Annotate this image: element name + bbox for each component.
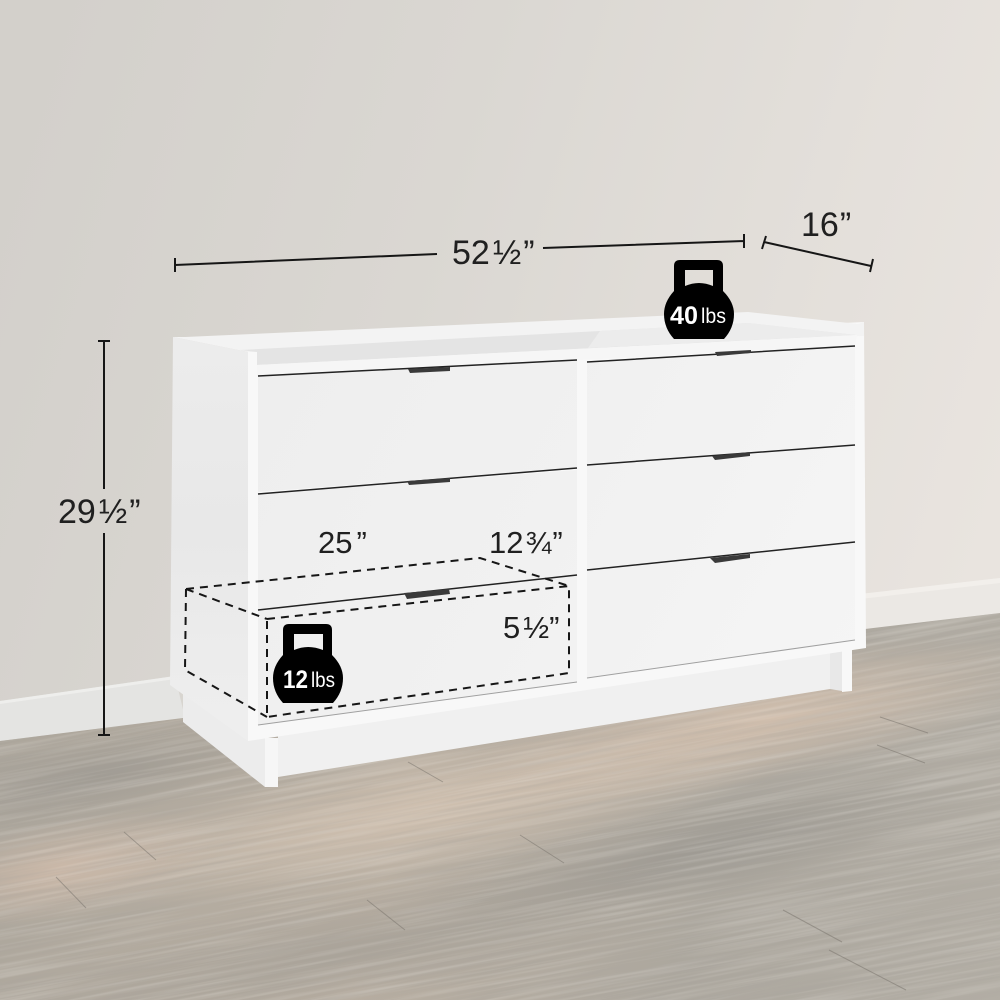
carcass front frame (248, 322, 866, 741)
plinth and feet (183, 648, 852, 787)
icon: 40 lbs kettlebell on top (664, 260, 734, 339)
drawer height label: 5½” (503, 610, 559, 645)
icon: 12 lbs kettlebell in drawer: 12 (283, 666, 308, 694)
width label: 52½” (452, 234, 535, 272)
icon: 12 lbs kettlebell in drawer: lbs (311, 669, 335, 692)
dresser (170, 312, 866, 787)
drawer width label: 25” (318, 525, 367, 560)
width dimension line (175, 234, 744, 272)
wall (0, 0, 1000, 760)
drawer top shadow lines (258, 346, 855, 610)
icon: 40 lbs kettlebell on top: lbs (701, 305, 726, 328)
baseboard (0, 578, 1000, 741)
height dimension line (98, 341, 110, 735)
carcass top with gallery rim (173, 312, 864, 376)
icon: 40 lbs kettlebell on top: 40 (670, 302, 698, 330)
right drawer fronts (587, 346, 855, 678)
carcass side panel (170, 337, 248, 741)
left drawer fronts (258, 360, 577, 725)
depth label: 16” (801, 206, 851, 244)
wood floor (0, 600, 1000, 1000)
drawer depth label: 12¾” (489, 525, 563, 560)
height label: 29½” (58, 493, 141, 531)
icon: 12 lbs kettlebell in drawer (273, 624, 343, 703)
drawer handles (404, 350, 751, 599)
dashed drawer interior outline (185, 558, 569, 717)
depth dimension line (762, 236, 873, 272)
